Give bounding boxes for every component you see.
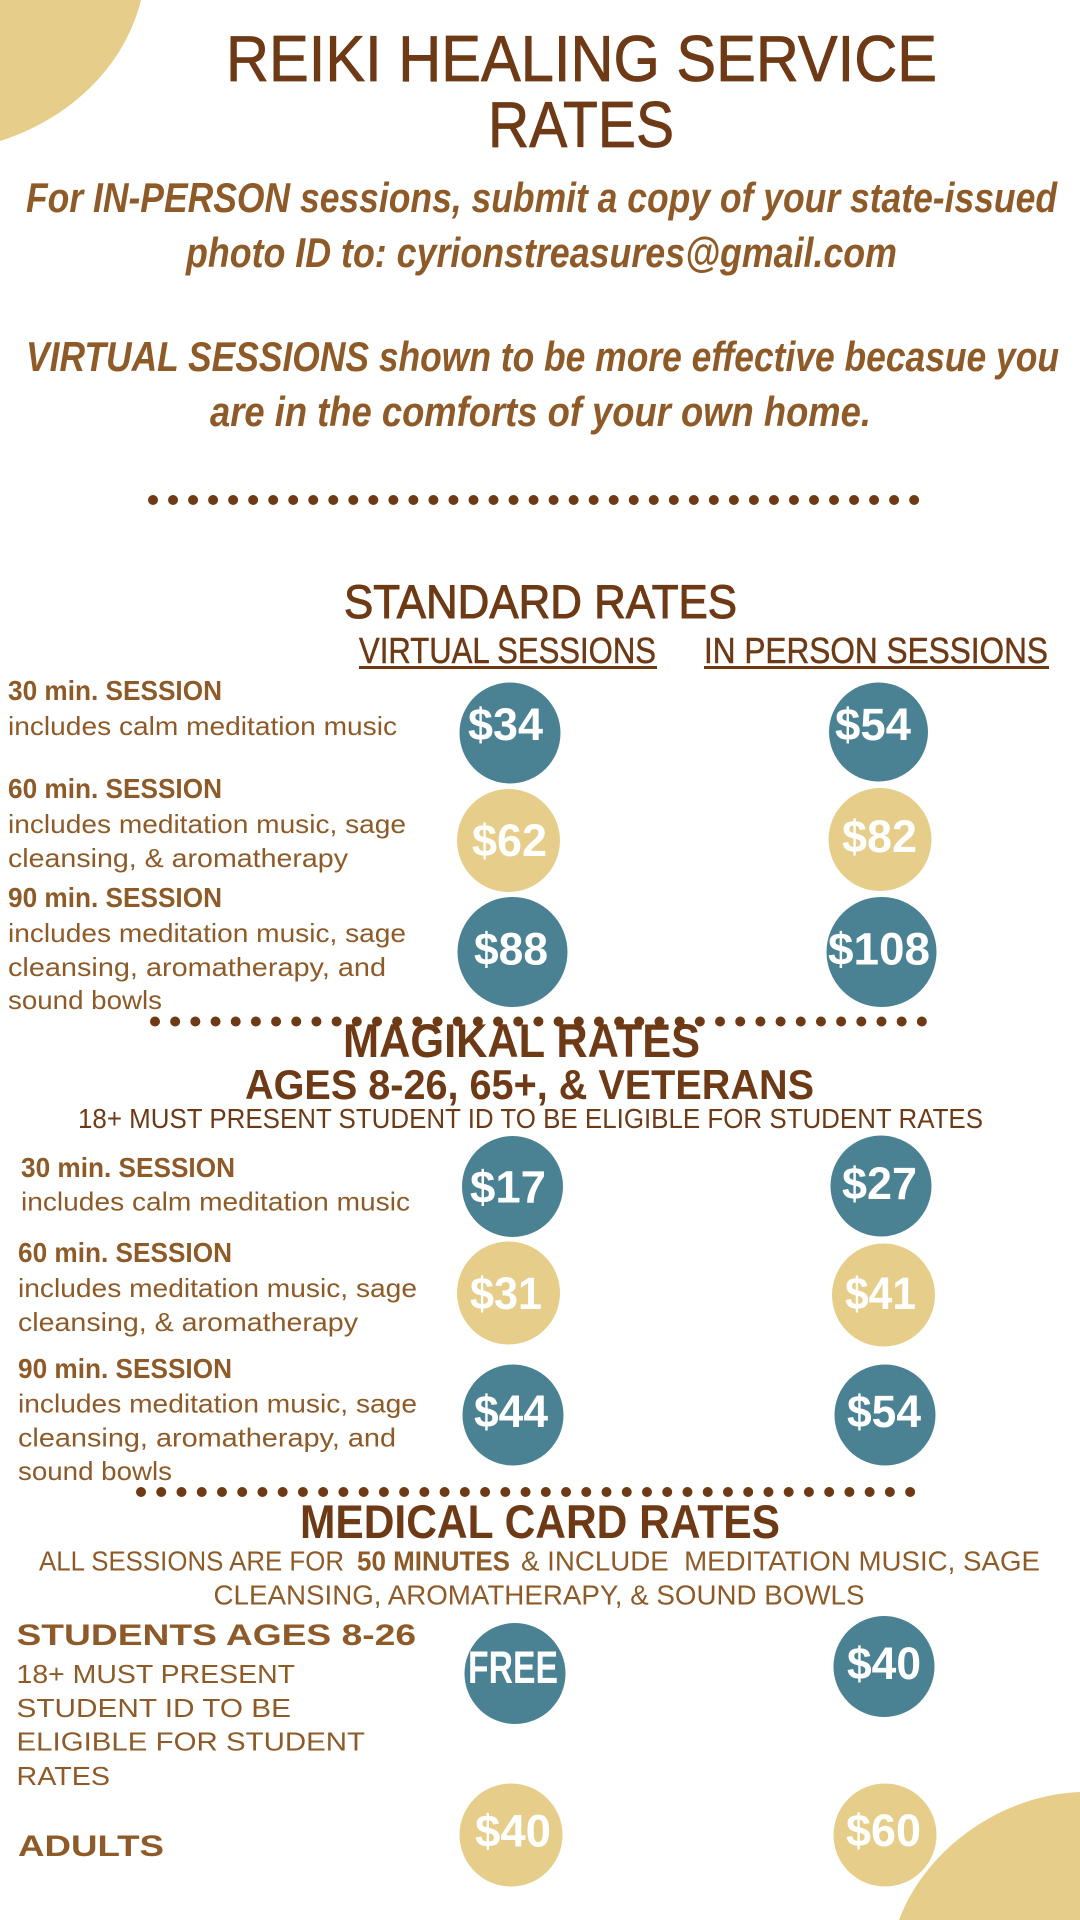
price: $62 virtual: $62: [472, 815, 547, 866]
price: $40 virtual: [460, 1784, 562, 1886]
heading: medical card rates: MEDICAL CARD RATES: [300, 1495, 780, 1548]
medical card description: & INCLUDE MEDITATION MUSIC, SAGE: [521, 1546, 1040, 1576]
row: 30 min session: [8, 675, 397, 741]
price: $27 in person: $27: [842, 1158, 917, 1209]
decorative corner shape: bottom right: [899, 1792, 1080, 1920]
row: 60 min session: cleansing, & aromatherapy: [18, 1307, 358, 1337]
virtual sessions notice: [26, 333, 1059, 435]
price: $108 in person: $108: [828, 924, 930, 974]
row: students ages 8-26: STUDENT ID TO BE: [16, 1693, 291, 1723]
row: students ages 8-26: RATES: [16, 1761, 110, 1791]
row: 90 min session: sound bowls: [18, 1456, 172, 1486]
price: $82 in person: [828, 788, 932, 891]
price: $34 virtual: [460, 682, 560, 784]
price: $54 in person: [829, 682, 928, 782]
row: 60 min session: includes meditation music, sage: [8, 809, 406, 839]
price: $82 in person: $82: [842, 811, 917, 862]
price: $54 in person: $54: [847, 1386, 921, 1437]
price: $108 in person: [826, 897, 936, 1007]
row: students ages 8-26: STUDENTS AGES 8-26: [16, 1619, 416, 1652]
row: students ages 8-26: 18+ MUST PRESENT: [16, 1659, 295, 1689]
panel: standard rates: [8, 575, 1049, 1015]
price: $44 virtual: [462, 1364, 564, 1466]
price: $40 virtual: $40: [475, 1806, 551, 1856]
row: 90 min session: cleansing, aromatherapy, and: [18, 1422, 396, 1452]
price: $40 in person: $40: [847, 1638, 921, 1689]
row: 60 min session: includes meditation music, sage: [18, 1273, 417, 1303]
row: 90 min session: 90 min. SESSION: [18, 1353, 232, 1384]
price: $60 in person: $60: [846, 1805, 921, 1856]
price: $17 virtual: $17: [470, 1162, 546, 1212]
row: 30 min session: 30 min. SESSION: [8, 675, 222, 706]
row: 90 min session: includes meditation music, sage: [8, 918, 406, 948]
price: $54 in person: $54: [835, 699, 911, 750]
price: $17 virtual: [462, 1136, 563, 1237]
price: $60 in person: [834, 1784, 936, 1886]
price: FREE virtual: [464, 1623, 566, 1724]
row: 90 min session: 90 min. SESSION: [8, 882, 222, 913]
eligibility note: 18+ MUST PRESENT STUDENT ID TO BE ELIGIBLE FOR STUDENT RATES: [78, 1103, 983, 1134]
medical card description: CLEANSING, AROMATHERAPY, & SOUND BOWLS: [214, 1580, 864, 1610]
price: $40 in person: [834, 1616, 934, 1717]
row: students ages 8-26: [16, 1619, 416, 1791]
row: 30 min session: includes calm meditation music: [8, 711, 397, 741]
price: $88 virtual: $88: [474, 924, 548, 974]
row: 60 min session: [8, 773, 406, 873]
price: FREE virtual: FREE: [468, 1642, 558, 1693]
row: 30 min session: includes calm meditation music: [21, 1186, 410, 1216]
row: 30 min session: [21, 1152, 410, 1216]
row: 60 min session: [18, 1237, 417, 1337]
decorative corner shape: top left: [0, 0, 141, 141]
column heading: virtual sessions: VIRTUAL SESSIONS: [359, 630, 656, 671]
heading: magikal rates: MAGIKAL RATES: [343, 1014, 700, 1067]
row: adults: ADULTS: [18, 1830, 164, 1863]
panel: magikal rates: [18, 1014, 983, 1486]
price: $41 in person: $41: [845, 1268, 916, 1319]
row: 60 min session: cleansing, & aromatherapy: [8, 843, 348, 873]
price: $34 virtual: $34: [468, 699, 543, 750]
title: REIKI HEALING SERVICE: [226, 22, 937, 95]
row: students ages 8-26: ELIGIBLE FOR STUDENT: [16, 1726, 365, 1756]
title: RATES: [488, 88, 674, 161]
medical card description: ALL SESSIONS ARE FOR: [39, 1546, 344, 1576]
medical card description: 50 MINUTES: [357, 1546, 510, 1576]
in-person sessions notice: [26, 174, 1058, 276]
price: $41 in person: [832, 1244, 935, 1346]
price: $31 virtual: [457, 1242, 560, 1344]
row: 90 min session: cleansing, aromatherapy, and: [8, 952, 386, 982]
medical card description: [39, 1546, 1040, 1610]
price: $54 in person: [834, 1364, 936, 1466]
row: 90 min session: sound bowls: [8, 985, 162, 1015]
row: 90 min session: [18, 1353, 417, 1486]
subheading: eligible ages: AGES 8-26, 65+, & VETERANS: [245, 1061, 814, 1108]
price: $44 virtual: $44: [474, 1386, 548, 1437]
row: 90 min session: includes meditation music, sage: [18, 1388, 417, 1418]
title: [226, 22, 937, 161]
price: $27 in person: [830, 1136, 932, 1236]
row: 30 min session: 30 min. SESSION: [21, 1152, 235, 1183]
row: 90 min session: [8, 882, 406, 1015]
price: $88 virtual: [458, 897, 568, 1007]
in-person sessions notice: photo ID to: cyrionstreasures@gmail.com: [185, 229, 897, 276]
price: $31 virtual: $31: [470, 1268, 542, 1319]
row: 60 min session: 60 min. SESSION: [8, 773, 222, 804]
heading: standard rates: STANDARD RATES: [344, 575, 737, 628]
virtual sessions notice: are in the comforts of your own home.: [210, 388, 871, 435]
price: $62 virtual: [457, 789, 560, 892]
row: 60 min session: 60 min. SESSION: [18, 1237, 232, 1268]
panel: medical card rates: [16, 1495, 1040, 1886]
